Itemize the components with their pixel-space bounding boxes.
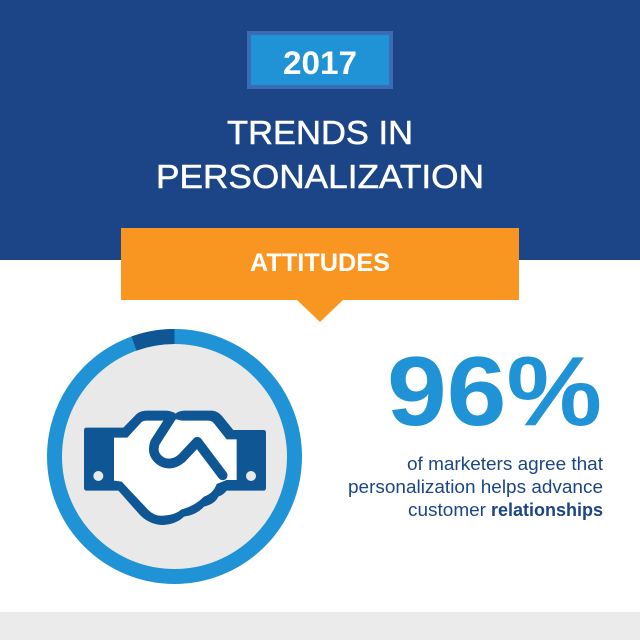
title: TRENDS IN bbox=[227, 115, 413, 152]
panel: footer band bbox=[0, 612, 640, 640]
stat description: personalization helps advance bbox=[348, 477, 603, 497]
title bbox=[156, 115, 484, 196]
big stat: 96%: 96% bbox=[387, 336, 602, 446]
panel: header band bbox=[0, 0, 640, 260]
year badge bbox=[247, 31, 393, 89]
section banner: attitudes bbox=[121, 228, 519, 322]
icon: handshake bbox=[84, 411, 266, 525]
stat description: of marketers agree that bbox=[407, 454, 603, 474]
section banner: attitudes: ATTITUDES bbox=[250, 249, 390, 277]
year badge: 2017 bbox=[283, 45, 357, 81]
stat description bbox=[348, 454, 603, 520]
title: PERSONALIZATION bbox=[156, 159, 484, 196]
stat description: customer bbox=[408, 500, 486, 520]
stat description: relationships bbox=[491, 500, 603, 520]
donut chart: 96 percent bbox=[54, 336, 294, 576]
